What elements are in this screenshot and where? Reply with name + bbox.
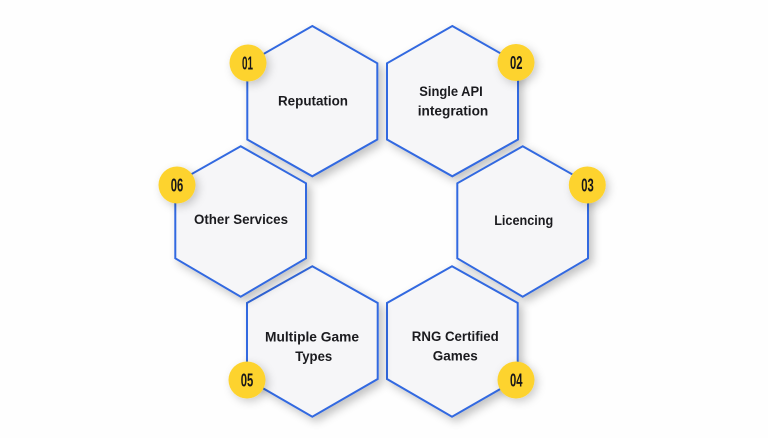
badge 03 [569,166,606,204]
panel: 05 Multiple Game Types [247,266,378,417]
panel: 05 Multiple Game Types: Types [295,349,332,364]
panel: 04 RNG Certified Games: Games [433,349,478,364]
panel: 03 Licencing [457,146,588,297]
badge 02: 02 [510,53,523,73]
badge 05 [228,362,266,398]
badge 02 [498,44,534,81]
badge 04: 04 [510,370,523,390]
panel: 04 RNG Certified Games [387,266,518,417]
panel: 02 Single API integration: integration [418,104,488,118]
panel: 05 Multiple Game Types: Multiple Game [265,330,360,344]
badge 06: 06 [171,176,183,196]
badge 03: 03 [581,176,594,196]
panel: 03 Licencing: Licencing [494,213,553,228]
badge 01: 01 [242,54,253,74]
panel: 06 Other Services: Other Services [194,212,288,227]
panel: 02 Single API integration: Single API [419,84,483,99]
badge 01 [230,44,266,82]
badge 04 [498,362,534,398]
badge 06 [158,166,196,204]
badge 05: 05 [241,370,253,390]
panel: 06 Other Services [175,146,306,297]
panel: 02 Single API integration [387,26,518,176]
panel: 04 RNG Certified Games: RNG Certified [412,329,499,344]
panel: 01 Reputation: Reputation [278,94,348,108]
panel: 01 Reputation [247,26,377,176]
